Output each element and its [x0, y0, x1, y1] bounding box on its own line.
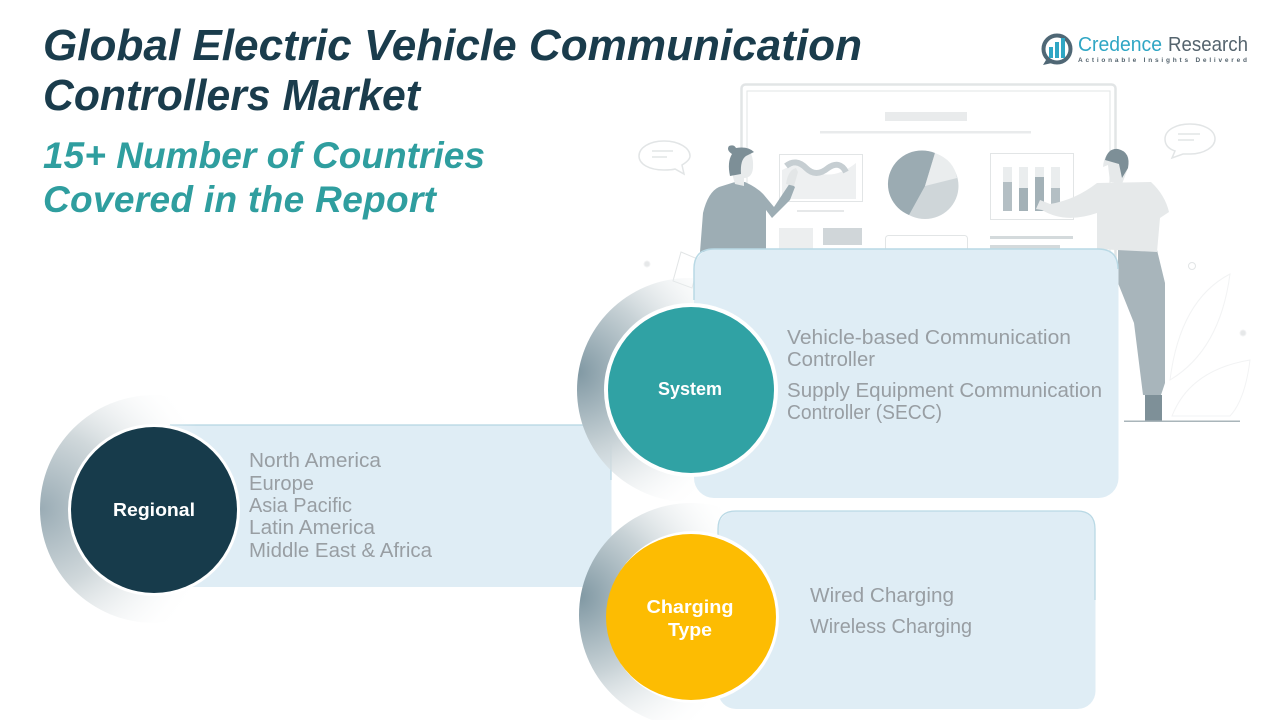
regional list: Asia Pacific	[249, 495, 352, 517]
system list: Supply Equipment Communication	[787, 380, 1102, 402]
illustration: pie chart	[888, 150, 958, 219]
regional list: Europe	[249, 473, 314, 495]
title: Global Electric Vehicle Communication	[43, 21, 862, 70]
illustration: bar chart	[990, 154, 1074, 220]
subtitle: 15+ Number of Countries	[43, 135, 485, 176]
illustration: woman presenter	[700, 145, 798, 252]
circle: regional	[68, 424, 240, 596]
circle: system: System	[658, 379, 722, 399]
panel: charging type	[718, 511, 1096, 709]
illustration: faint leaves and dots	[644, 252, 1250, 416]
logo: Credence Research: Research	[1168, 34, 1248, 56]
regional list: Latin America	[249, 517, 376, 539]
title: Controllers Market	[43, 71, 422, 120]
regional list: Middle East & Africa	[249, 540, 433, 562]
icon: logo mark	[1043, 36, 1070, 65]
regional list: North America	[249, 450, 382, 472]
charging type list: Wireless Charging	[810, 616, 972, 638]
regional list	[249, 450, 433, 562]
subtitle: Covered in the Report	[43, 179, 438, 220]
panel: system	[694, 249, 1118, 498]
icon: left speech bubble	[639, 141, 690, 174]
crescent: charging type	[579, 503, 803, 720]
crescent: system	[577, 278, 801, 502]
logo: Credence Research: Credence	[1078, 34, 1162, 56]
charging type list: Wired Charging	[810, 585, 954, 607]
circle: charging type: Charging	[646, 597, 734, 617]
circle: charging type: Type	[668, 620, 712, 640]
system list: Vehicle-based Communication	[787, 327, 1071, 349]
circle: system	[604, 303, 778, 477]
illustration: presenters at dashboard board	[639, 84, 1250, 424]
crescent: regional	[40, 395, 268, 623]
circle: regional: Regional	[113, 500, 195, 520]
circle: charging type	[606, 531, 779, 703]
title	[43, 21, 862, 120]
logo: Credence Research: Actionable Insights Delivered	[1078, 57, 1247, 64]
system list: Controller	[787, 349, 875, 371]
system list	[787, 327, 1102, 424]
illustration: lower board items	[779, 210, 1073, 256]
illustration: presentation board	[742, 84, 1116, 424]
logo: Credence Research	[1043, 34, 1248, 65]
panel: regional	[150, 425, 612, 587]
illustration: board heading bars	[820, 112, 1031, 134]
system list: Controller (SECC)	[787, 402, 942, 424]
icon: right speech bubble	[1165, 124, 1215, 158]
illustration: area chart	[780, 154, 862, 202]
charging type list	[810, 585, 972, 638]
subtitle	[43, 135, 485, 220]
illustration: man presenter	[1036, 149, 1240, 422]
